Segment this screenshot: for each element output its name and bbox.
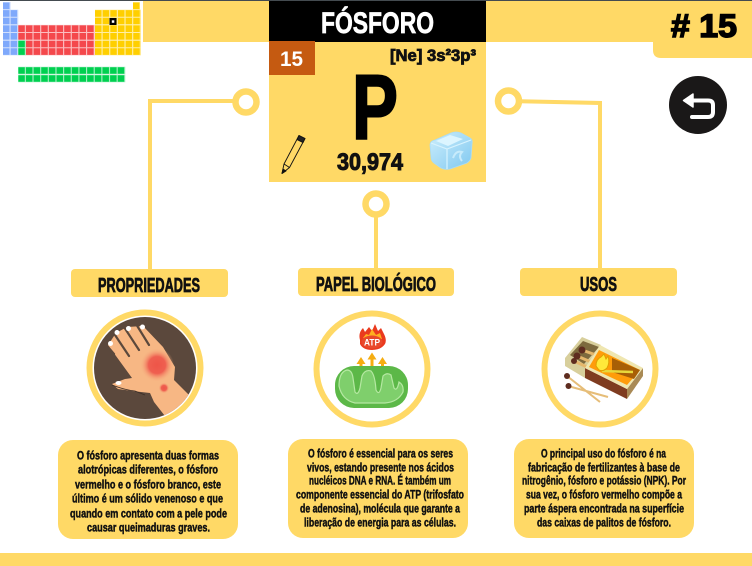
text block: papel biológico: de adenosina), molécula que garante a xyxy=(300,502,460,516)
text block: papel biológico: liberação de energia para as células. xyxy=(304,516,456,530)
element card xyxy=(269,41,486,182)
periodic table mini map xyxy=(3,6,141,78)
flame: ATP xyxy=(364,338,381,348)
connector: center xyxy=(366,194,386,270)
arrows xyxy=(356,352,387,371)
tab: element index: # 15 xyxy=(671,8,737,44)
title: FÓSFORO xyxy=(321,6,434,40)
heading: papel biológico: PAPEL BIOLÓGICO xyxy=(316,272,436,296)
heading: usos: USOS xyxy=(580,274,617,296)
text block: usos: fabricação de fertilizantes à base de xyxy=(528,460,680,474)
icon: burned hand xyxy=(90,312,200,425)
icon: ATP mitochondrion xyxy=(316,314,428,424)
element symbol: P xyxy=(352,57,398,159)
icon: ice cube xyxy=(430,132,472,169)
matches in tray xyxy=(574,350,596,367)
lit match xyxy=(602,371,633,372)
atomic number: 15 xyxy=(280,48,303,71)
heading: propriedades: PROPRIEDADES xyxy=(98,275,200,297)
connector: left xyxy=(150,92,256,270)
text block: propriedades: quando em contato com a pele pode xyxy=(70,506,227,520)
title xyxy=(269,1,486,42)
sleeve xyxy=(585,368,627,399)
tab: element index xyxy=(653,8,752,58)
text block: usos: sua vez, o fósforo vermelho compõe a xyxy=(526,488,682,502)
icon: pencil xyxy=(282,136,305,174)
heading: propriedades xyxy=(71,269,228,297)
electron configuration: [Ne] 3s²3p³ xyxy=(390,46,476,65)
text block: usos: O principal uso do fósforo é na xyxy=(541,446,666,460)
text block: papel biológico: vivos, estando presente nos ácidos xyxy=(307,460,454,474)
text block: usos: nitrogênio, fósforo e potássio (NPK). Por xyxy=(522,474,686,488)
text block: propriedades: vermelho e o fósforo branco, este xyxy=(75,478,221,492)
text block: propriedades: último é um sólido venenoso e que xyxy=(72,492,223,506)
top banner xyxy=(143,1,752,42)
text block: papel biológico xyxy=(288,439,468,538)
text block: usos xyxy=(514,439,694,538)
icon: back button xyxy=(669,76,727,134)
icon: matchbox xyxy=(544,314,656,424)
tray xyxy=(565,337,601,378)
text block: usos: das caixas de palitos de fósforo. xyxy=(537,516,671,530)
mitochondrion xyxy=(335,366,408,408)
text block: papel biológico: componente essencial do ATP (trifosfato xyxy=(296,488,464,502)
text block: usos: parte áspera encontrada na superfície xyxy=(524,502,684,516)
text block: papel biológico: nucléicos DNA e RNA. É também um xyxy=(309,472,451,488)
text block: propriedades: O fósforo apresenta duas formas xyxy=(77,448,219,462)
atomic mass: 30,974 xyxy=(337,149,404,176)
atomic number xyxy=(269,41,315,75)
text block: propriedades xyxy=(58,440,238,539)
text block: propriedades: causar queimaduras graves. xyxy=(87,520,210,534)
heading: usos xyxy=(520,268,677,296)
loose matches xyxy=(567,376,608,402)
bottom bar xyxy=(0,553,752,566)
connector: right xyxy=(498,90,600,270)
heading: papel biológico xyxy=(298,268,454,296)
text block: propriedades: alotrópicas diferentes, o fósforo xyxy=(78,462,218,476)
text block: papel biológico: O fósforo é essencial para os seres xyxy=(308,446,453,460)
